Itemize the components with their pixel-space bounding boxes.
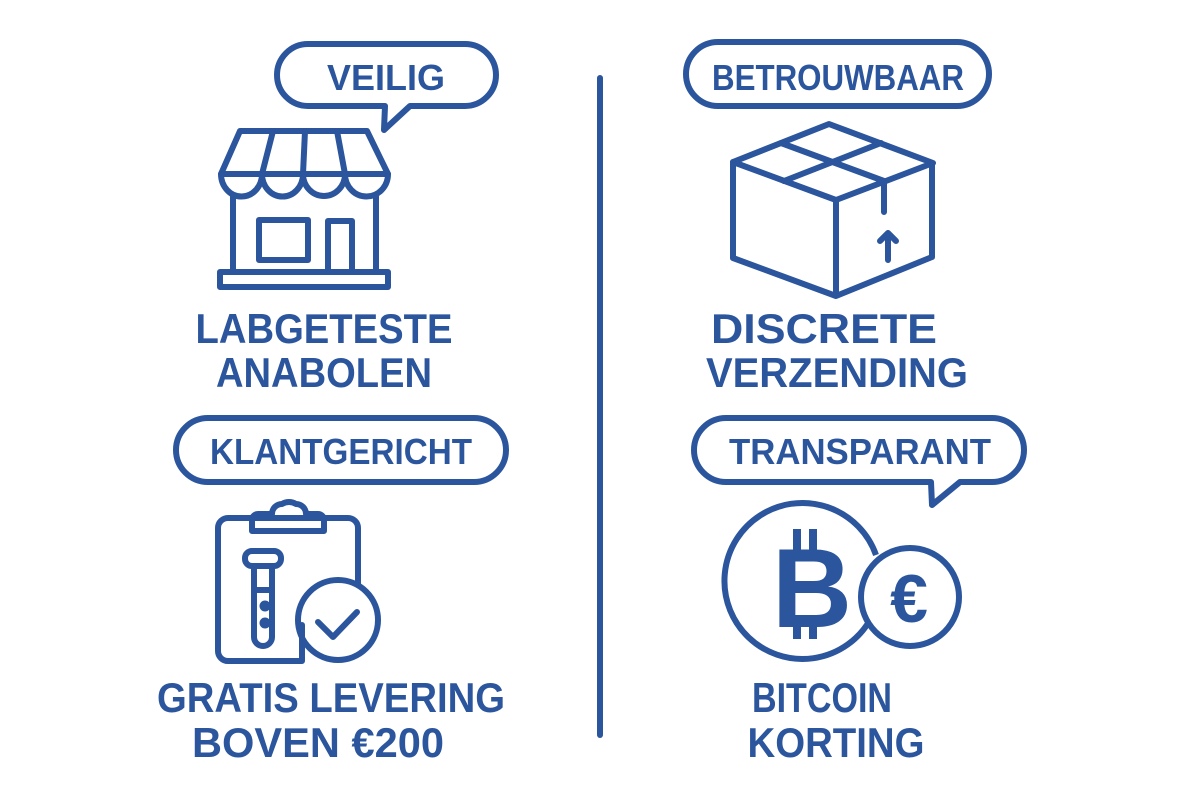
icon: box [733, 124, 933, 296]
bubble: KLANTGERICHT [176, 418, 506, 482]
text: gratis levering boven 200 [157, 674, 505, 766]
text: gratis levering boven 200: GRATIS LEVERING [157, 674, 505, 721]
bubble: VEILIG [277, 44, 496, 130]
text: discrete verzending: VERZENDING [706, 349, 968, 396]
icon: clipboard with test tube and check [218, 502, 378, 661]
bubble: KLANTGERICHT: KLANTGERICHT [210, 431, 472, 472]
text: gratis levering boven 200: BOVEN €200 [192, 719, 444, 766]
text: discrete verzending [706, 305, 968, 396]
icon: bitcoin and euro coins [724, 503, 959, 659]
icon: bitcoin and euro coins: B [772, 526, 852, 651]
bubble: BETROUWBAAR [686, 42, 989, 106]
text: labgeteste anabolen: ANABOLEN [216, 349, 432, 396]
text: discrete verzending: DISCRETE [711, 305, 937, 352]
bubble: TRANSPARANT [694, 418, 1024, 505]
bubble: TRANSPARANT: TRANSPARANT [729, 431, 991, 472]
bubble: VEILIG: VEILIG [327, 57, 445, 98]
text: labgeteste anabolen [196, 305, 452, 396]
text: labgeteste anabolen: LABGETESTE [196, 305, 452, 352]
text: bitcoin korting: BITCOIN [752, 674, 892, 721]
icon: bitcoin and euro coins: € [890, 561, 928, 637]
text: bitcoin korting: KORTING [748, 719, 924, 766]
bubble: BETROUWBAAR: BETROUWBAAR [712, 57, 964, 98]
icon: store [220, 131, 388, 287]
text: bitcoin korting [748, 674, 924, 766]
